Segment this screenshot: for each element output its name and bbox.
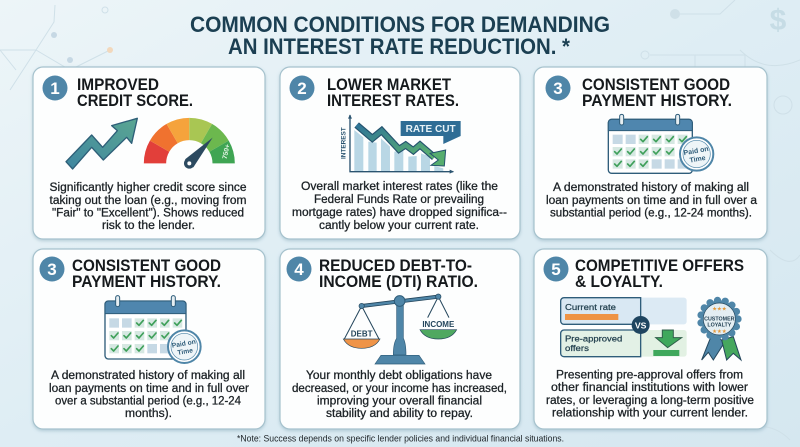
heading: improved credit score: CREDIT SCORE. xyxy=(77,92,193,110)
heading: lower market interest rates: INTEREST RATES. xyxy=(327,92,459,110)
heading: consistent good payment history: PAYMENT HISTORY. xyxy=(582,92,732,110)
icon: dollar sign: $ xyxy=(770,4,787,37)
body text xyxy=(50,180,247,232)
number badge 3 xyxy=(546,76,570,100)
heading: consistent good payment history: PAYMENT HISTORY. xyxy=(72,273,221,291)
icon: calendar with paid on time stamp: Time xyxy=(177,347,194,357)
body text: "Fair" to "Excellent"). Shows reduced xyxy=(52,206,244,220)
body text: rates, or leveraging a long-term positive xyxy=(546,393,754,407)
panel: improved credit score xyxy=(33,67,265,239)
icon: customer loyalty badge: ★★★ xyxy=(712,306,727,312)
body text: taking out the loan (e.g., moving from xyxy=(50,193,246,207)
body text xyxy=(292,179,507,232)
icon: calendar with paid on time stamp: Time xyxy=(689,155,706,165)
number badge 4 xyxy=(286,256,312,282)
icon: calendar with paid on time stamp xyxy=(608,114,713,173)
body text xyxy=(49,368,249,420)
title xyxy=(190,12,610,59)
number badge 3 xyxy=(40,256,64,282)
number badge 3: 3 xyxy=(47,260,57,279)
body text: A demonstrated history of making all xyxy=(553,180,749,194)
icon: credit score gauge xyxy=(155,129,232,169)
body text: risk to the lender. xyxy=(102,218,195,232)
comparison: current rate vs pre-approved offers: VS xyxy=(635,320,647,330)
icon: customer loyalty badge: ★★★ xyxy=(712,329,727,335)
body text: substantial period (e.g., 12-24 months). xyxy=(550,206,752,220)
comparison: current rate vs pre-approved offers: Current rate xyxy=(565,302,616,312)
panel: lower market interest rates xyxy=(280,67,520,239)
body text: Federal Funds Rate or prevailing xyxy=(314,192,484,206)
footnote: *Note: Success depends on specific lender policies and individual financial situations. xyxy=(237,434,564,444)
body text xyxy=(292,368,507,420)
heading: consistent good payment history: CONSISTENT GOOD xyxy=(72,257,221,275)
body text: decreased, or your income has increased, xyxy=(292,381,507,395)
panel: consistent good payment history (second) xyxy=(33,249,265,429)
heading: competitive offers and loyalty: & LOYALTY. xyxy=(575,273,663,291)
body text: loan payments on time and in full over xyxy=(49,381,249,395)
heading: improved credit score: IMPROVED xyxy=(77,76,159,94)
body text: improving your overall financial xyxy=(317,394,482,408)
heading: consistent good payment history: CONSISTENT GOOD xyxy=(582,76,730,94)
icon: calendar with paid on time stamp: Paid on xyxy=(683,146,709,157)
heading: lower market interest rates: LOWER MARKET xyxy=(327,76,451,94)
icon: rising arrow xyxy=(66,118,137,169)
panel: reduced debt-to-income ratio xyxy=(280,249,520,429)
body text: cantly below your current rate. xyxy=(319,218,479,232)
icon: customer loyalty badge: CUSTOMER xyxy=(704,316,735,322)
number badge 2: 2 xyxy=(297,79,307,98)
panel: consistent good payment history xyxy=(534,67,767,239)
body text: Overall market interest rates (like the xyxy=(301,179,498,193)
icon: balance scale xyxy=(343,294,457,364)
heading: reduced debt-to-income ratio xyxy=(319,257,478,291)
body text: A demonstrated history of making all xyxy=(51,368,245,382)
body text: loan payments on time and in full over a xyxy=(546,193,757,207)
body text: over a substantial period (e.g., 12-24 xyxy=(55,394,241,408)
icon: balance scale: DEBT xyxy=(351,329,373,338)
body text: months). xyxy=(125,406,172,420)
comparison: current rate vs pre-approved offers: offers xyxy=(565,343,589,353)
body text: Significantly higher credit score since xyxy=(50,180,247,194)
title: COMMON CONDITIONS FOR DEMANDING xyxy=(190,12,610,37)
icon: credit score gauge: 750+ xyxy=(222,144,232,160)
panel: competitive offers and loyalty xyxy=(534,249,767,429)
heading: lower market interest rates xyxy=(327,76,459,110)
heading: improved credit score xyxy=(77,76,193,110)
number badge 4: 4 xyxy=(294,260,304,279)
number badge 5: 5 xyxy=(551,260,561,279)
number badge 2 xyxy=(290,76,314,100)
heading: reduced debt-to-income ratio: REDUCED DEBT-TO- xyxy=(319,257,472,275)
heading: consistent good payment history xyxy=(72,257,221,291)
chart: falling interest rates: RATE CUT xyxy=(406,124,456,135)
comparison: current rate vs pre-approved offers: Pre-approved xyxy=(565,334,623,344)
body text: mortgage rates) have dropped significa-- xyxy=(292,205,507,219)
body text: stability and ability to repay. xyxy=(326,406,473,420)
body text: Your monthly debt obligations have xyxy=(306,368,492,382)
body text xyxy=(546,180,757,220)
number badge 1 xyxy=(42,76,68,100)
comparison: current rate vs pre-approved offers xyxy=(561,298,687,357)
icon: customer loyalty badge: LOYALTY xyxy=(707,322,732,328)
number badge 3: 3 xyxy=(553,79,563,98)
number badge 1: 1 xyxy=(50,79,60,98)
body text: relationship with your current lender. xyxy=(552,406,748,420)
body text: Presenting pre-approval offers from xyxy=(556,368,743,382)
icon: customer loyalty badge xyxy=(701,300,741,360)
heading: competitive offers and loyalty xyxy=(575,257,744,291)
heading: competitive offers and loyalty: COMPETITIVE OFFERS xyxy=(575,257,744,275)
heading: reduced debt-to-income ratio: INCOME (DTI) RATIO. xyxy=(319,273,478,291)
body text xyxy=(546,368,754,420)
number badge 5 xyxy=(544,256,568,282)
icon: calendar with paid on time stamp: Paid on xyxy=(171,339,196,350)
chart: falling interest rates: INTEREST xyxy=(340,127,347,159)
icon: calendar with paid on time stamp xyxy=(105,296,201,363)
title: AN INTEREST RATE REDUCTION. * xyxy=(228,34,570,59)
heading: consistent good payment history xyxy=(582,76,732,110)
body text: other financial institutions with lower xyxy=(551,380,748,394)
chart: falling interest rates xyxy=(340,114,461,174)
icon: balance scale: INCOME xyxy=(422,320,455,329)
